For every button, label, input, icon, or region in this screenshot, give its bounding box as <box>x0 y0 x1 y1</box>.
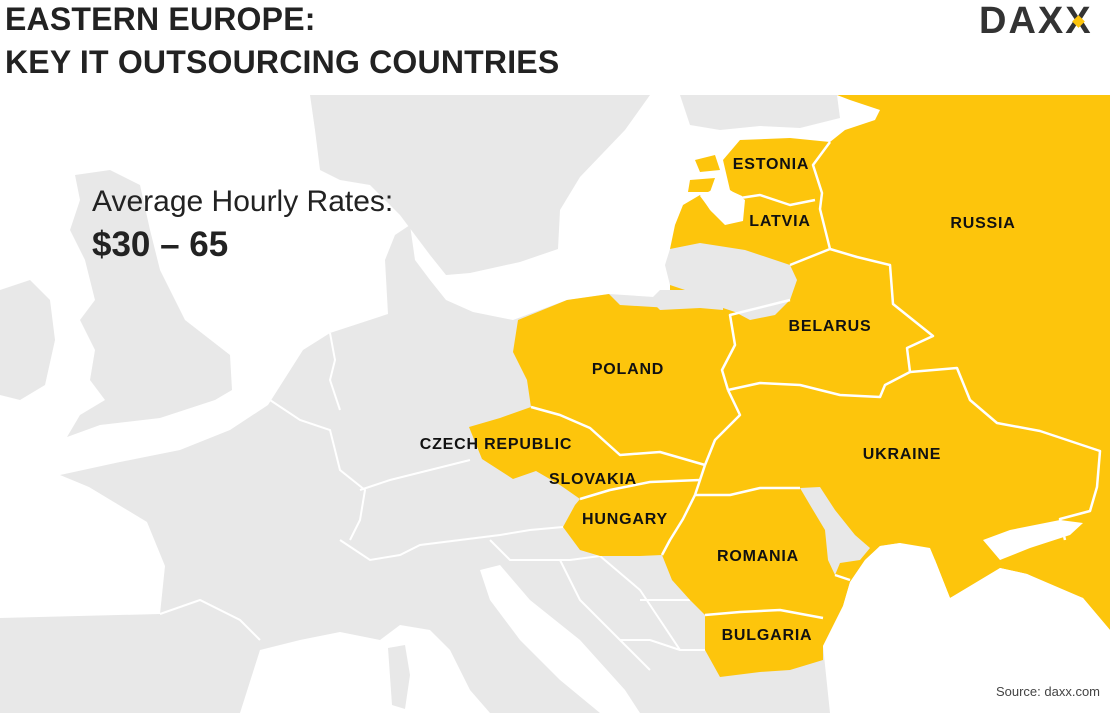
borders east <box>531 142 1100 618</box>
yellow countries <box>469 95 1110 677</box>
title <box>5 1 559 80</box>
country labels: BULGARIA <box>722 627 812 644</box>
country labels: RUSSIA <box>950 215 1016 232</box>
country labels: ESTONIA <box>733 156 809 173</box>
country labels: POLAND <box>592 361 664 378</box>
source: Source: daxx.com <box>996 684 1100 699</box>
rates text block: Average Hourly Rates: <box>92 185 393 218</box>
seas east <box>700 186 1110 713</box>
country labels: ROMANIA <box>717 548 799 565</box>
internal borders western europe <box>160 333 705 670</box>
country labels: UKRAINE <box>863 446 941 463</box>
country labels: SLOVAKIA <box>549 471 637 488</box>
country labels: BELARUS <box>789 318 871 335</box>
rates text block: $30 – 65 <box>92 225 228 264</box>
seas <box>240 565 640 713</box>
country labels: LATVIA <box>749 213 811 230</box>
title: KEY IT OUTSOURCING COUNTRIES <box>5 44 559 80</box>
gray non-highlighted east <box>650 243 870 575</box>
logo: DAXX: DAXX <box>979 0 1093 42</box>
title: EASTERN EUROPE: <box>5 1 316 37</box>
land: gray base <box>0 95 900 713</box>
country labels <box>420 156 1016 644</box>
country labels: HUNGARY <box>582 511 668 528</box>
country labels: CZECH REPUBLIC <box>420 436 572 453</box>
rates text block <box>92 185 393 264</box>
